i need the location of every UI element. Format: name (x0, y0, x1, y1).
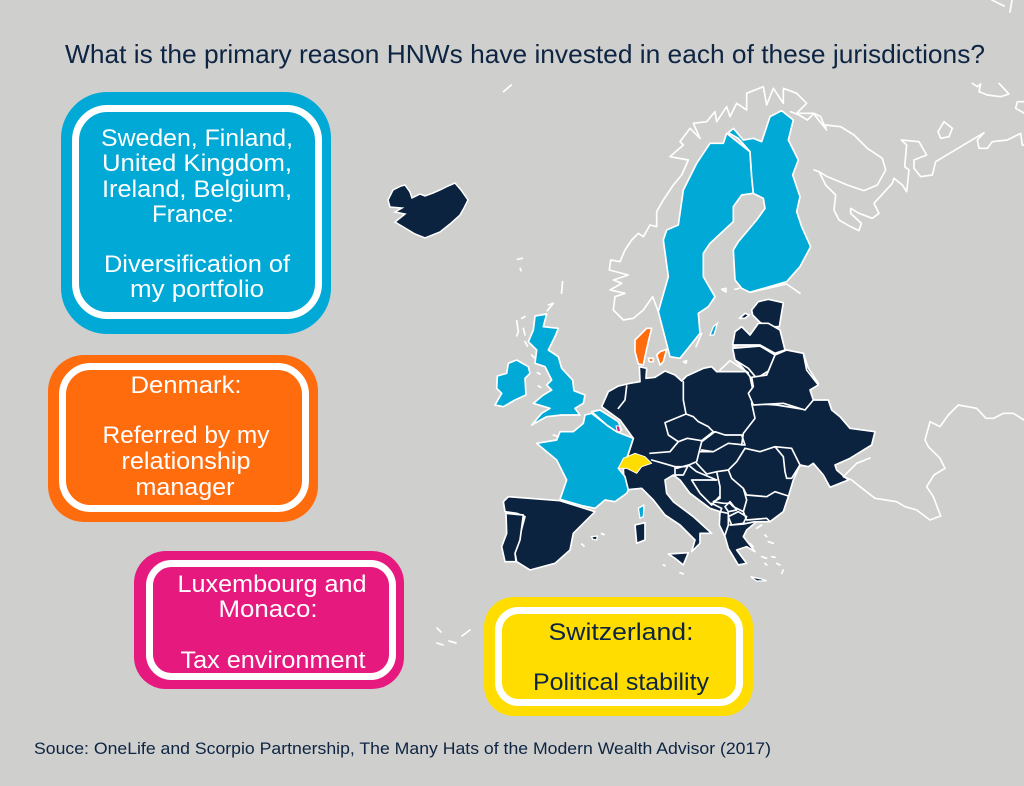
Crete (751, 577, 767, 581)
panel text: relationship manager: Referred by my (102, 422, 270, 449)
panel text: diversification: United Kingdom, (102, 150, 292, 177)
Zealand (657, 349, 667, 365)
Sicily (668, 553, 688, 565)
lake outline (938, 122, 952, 138)
panel text: relationship manager: relationship (122, 448, 250, 475)
Scandinavia (609, 87, 827, 358)
Gotland (710, 323, 717, 335)
Denmark and the Baltic states (635, 299, 818, 410)
Baltic states and Belarus (733, 299, 818, 410)
France (537, 413, 633, 508)
panel: tax environment (134, 551, 404, 689)
panel text: diversification (101, 125, 293, 303)
panel text: tax environment (178, 571, 366, 674)
map of Europe (388, 0, 1024, 645)
Belgium (592, 410, 622, 432)
panel text: relationship manager (102, 372, 270, 501)
panel text: relationship manager: manager (136, 474, 234, 501)
Belarus (748, 350, 818, 410)
panel text: diversification: Ireland, Belgium, (102, 176, 292, 203)
Majorca (592, 536, 597, 540)
Russia north-west outline (791, 83, 1024, 231)
France and Benelux overlay (537, 410, 633, 508)
Ireland (495, 360, 530, 407)
source note: Souce: OneLife and Scorpio Partnership, The Many Hats of the Modern Wealth Advisor (2017) (34, 739, 771, 758)
country borders (618, 377, 812, 535)
Iceland (388, 183, 468, 238)
United Kingdom (528, 314, 585, 425)
Arctic coast fragments (972, 83, 1024, 115)
Kola and White Sea coast (791, 112, 1024, 231)
central and southern Europe (602, 347, 875, 581)
Saaremaa (739, 313, 749, 318)
Sweden (658, 133, 753, 358)
Luxembourg (616, 426, 621, 432)
panel text: political stability: Switzerland: (548, 619, 694, 646)
British Isles (495, 303, 585, 425)
panel text: tax environment: Monaco: (218, 596, 318, 623)
panel text: political stability: Political stability (533, 669, 709, 696)
panel: diversification (61, 92, 331, 334)
Latvia (733, 323, 785, 353)
Iberia and southern Russia (502, 435, 604, 570)
panel text: relationship manager: Denmark: (130, 372, 242, 399)
panel: relationship manager (48, 355, 318, 522)
panel text: diversification: my portfolio (130, 276, 264, 303)
Corsica (638, 505, 644, 518)
panel text: tax environment: Tax environment (180, 647, 366, 674)
Finland (728, 111, 811, 292)
Canary Islands specks (437, 0, 1012, 645)
panel: political stability (484, 597, 753, 716)
title: What is the primary reason HNWs have invested in each of these jurisdictions? (65, 39, 985, 69)
Denmark (635, 328, 667, 365)
Aegean island specks (602, 525, 783, 574)
Gulf of Finland coast (722, 284, 800, 293)
Spain (503, 497, 595, 570)
Estonia (752, 299, 783, 327)
panel text: tax environment: Luxembourg and (178, 571, 366, 598)
panel text: diversification: Sweden, Finland, (101, 125, 293, 152)
panel text: political stability (533, 619, 709, 696)
Russia southern outline (843, 405, 1024, 520)
Portugal (502, 513, 523, 562)
Lithuania (733, 346, 775, 378)
Oland, Bornholm and Kaliningrad coast (683, 333, 748, 373)
navy mainland silhouette (602, 347, 875, 565)
Jutland (635, 328, 652, 365)
North Atlantic island specks (504, 85, 563, 293)
Sardinia (635, 523, 645, 543)
Mediterranean island specks (553, 435, 604, 546)
panel text: diversification: France: (152, 201, 234, 228)
Switzerland (618, 453, 652, 473)
Norway coast outline (609, 87, 827, 320)
panel text: diversification: Diversification of (104, 251, 290, 278)
Hebrides and small islands (517, 303, 553, 387)
Funen (648, 358, 653, 362)
